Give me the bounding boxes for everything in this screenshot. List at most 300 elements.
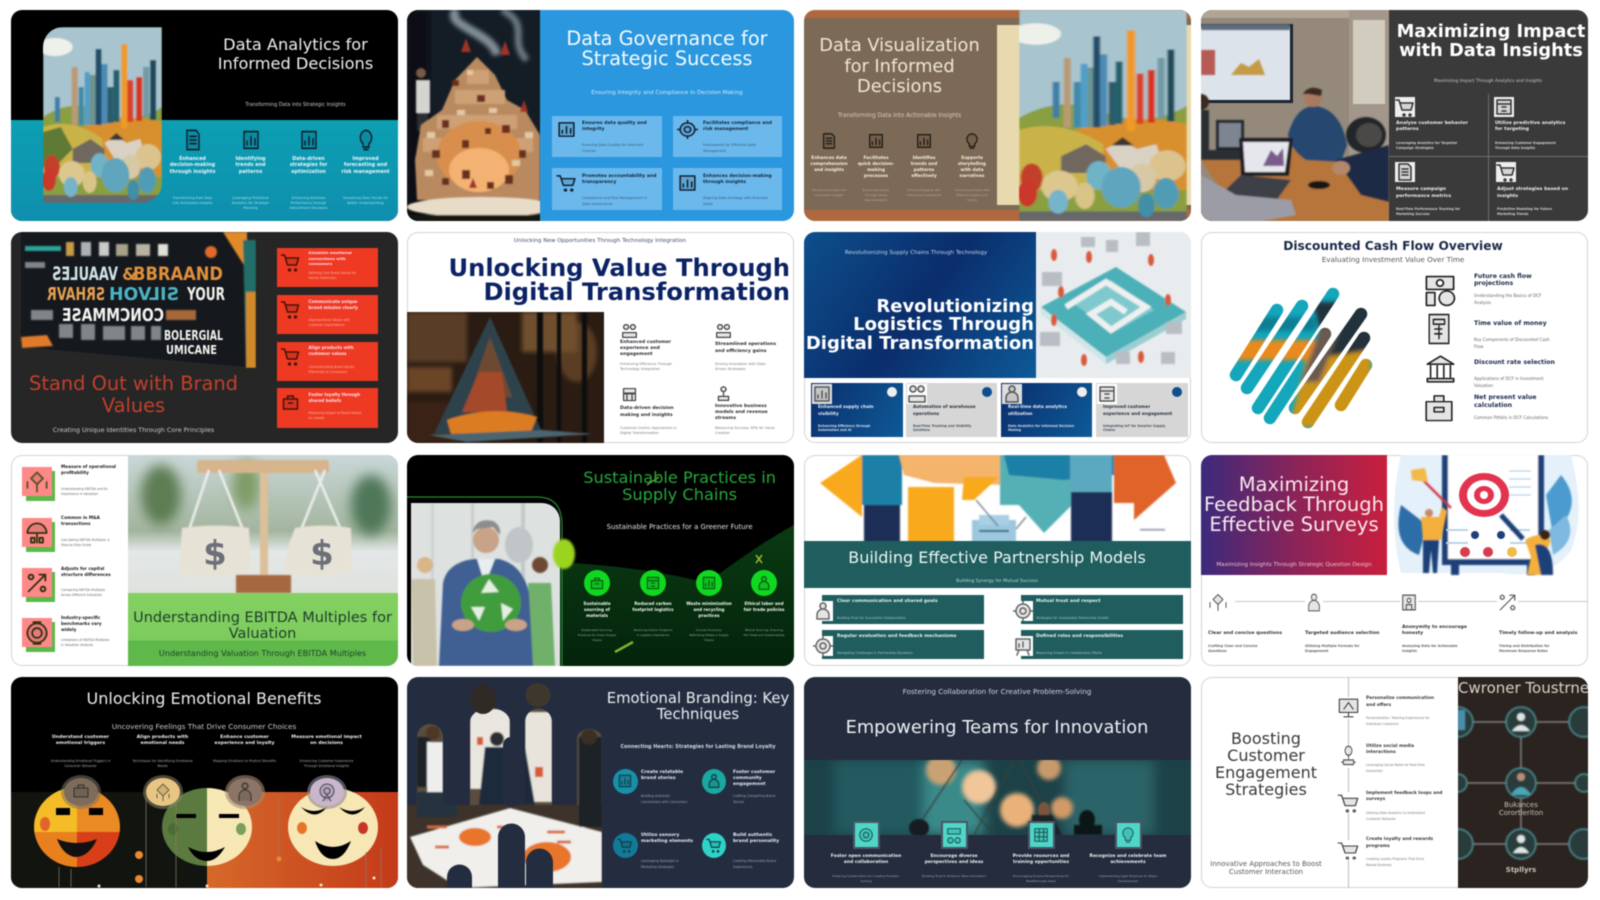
title [1215, 730, 1317, 798]
note 1 [172, 196, 213, 205]
note 3: Breakthrough Ideas [1026, 878, 1056, 882]
label 2: Align products with [137, 734, 188, 740]
item 2 note: Driven Strategies [715, 367, 746, 371]
label 2 [925, 854, 983, 866]
subtitle [1210, 860, 1322, 876]
item 4 text: insights [1497, 194, 1518, 199]
item note 2: Management [703, 148, 726, 152]
note 2: Techniques for Identifying Emotional [132, 758, 193, 762]
note 3: Mapping Emotions to Product Benefits [213, 758, 276, 762]
item 3 text: marketing elements [641, 839, 693, 844]
note 1: Chains [592, 638, 602, 642]
lime orb [553, 539, 575, 569]
item 3 text: Anonymity to encourage [1402, 624, 1467, 630]
item 4 note [733, 859, 776, 870]
item 1 text: profitability [61, 470, 89, 475]
note 4 [744, 628, 784, 638]
item 1 text: Create relatable [641, 770, 683, 775]
label 3: training opportunities [1013, 860, 1069, 865]
note: Automation and AI [818, 428, 852, 432]
subtitle: Sustainable Practices for a Greener Future [607, 523, 753, 531]
item note 4: Aligning Data Strategy with Business [703, 196, 768, 200]
item 1 note: Leveraging Analytics for Targeted [1396, 140, 1457, 144]
item 3 note [1402, 644, 1457, 655]
item 3 text [61, 566, 111, 579]
item 4 text: Net present value [1474, 394, 1536, 401]
icon: robot [907, 384, 927, 404]
note 3: Rethinking Waste in Supply [689, 632, 729, 636]
item 4 note [1366, 856, 1424, 868]
item 2 text: Streamlined operations [715, 342, 776, 347]
feature box 3 [276, 342, 378, 381]
image: mirrored typography wall: YOUR [186, 284, 225, 305]
label 4 [958, 154, 986, 179]
item 4 note [1499, 644, 1550, 655]
item 1 note [61, 486, 108, 496]
item 2 text: Foster customer [733, 770, 775, 775]
note: Data Analytics for Informed Decision [1008, 424, 1074, 428]
item 2 text [308, 298, 358, 310]
subtitle: Building Synergy for Mutual Success [956, 579, 1038, 584]
icon: notebook [242, 130, 260, 150]
item 4 text: Defined roles and responsibilities [1036, 634, 1123, 639]
note: Enhancing Efficiency through [818, 424, 870, 428]
icon: cart [617, 837, 633, 853]
image: meeting room photo [1201, 10, 1389, 221]
label 4: Supports [961, 156, 983, 161]
label 4: risk management [341, 169, 390, 175]
image: money bags on scale: $ [203, 534, 226, 574]
title [583, 468, 776, 502]
note 2 [132, 758, 193, 769]
title [448, 256, 790, 304]
item note 1: Choices [582, 148, 596, 152]
feature box 1 [552, 116, 662, 157]
note 2 [634, 628, 672, 638]
item 3 note: Real-Time Performance Tracking for [1396, 206, 1460, 210]
label 2: Encourage diverse [930, 854, 978, 859]
label 3 [686, 601, 732, 618]
item 2 text [61, 515, 100, 528]
note 4 [954, 188, 990, 203]
item 3 text [308, 344, 354, 356]
connector line [1235, 601, 1588, 602]
image: glowing globes band [804, 760, 1191, 835]
note 4: Ethical Sourcing: Ensuring [745, 628, 783, 632]
feature box 1 [276, 248, 378, 287]
item 4 text: Foster loyalty through [308, 392, 360, 396]
item 4 note: Experiences [733, 864, 752, 868]
note 4: Visualizing Data Trends for [343, 196, 388, 200]
item 4 text [715, 404, 768, 421]
label 4: Recognize and celebrate team [1090, 854, 1166, 859]
item 1 note: Questions [1208, 649, 1227, 653]
icon: award [715, 386, 732, 402]
note 1: Solving [860, 878, 872, 882]
label 1: Sustainable [583, 601, 611, 606]
panel: Sustainable Practices in Supply Chains [407, 455, 794, 666]
item 3 text [1402, 624, 1467, 638]
icon: document [678, 174, 696, 192]
image: mirrored typography wall: BBRAAND [132, 263, 222, 285]
item 3 text: Data-driven decision [620, 406, 674, 411]
label 3 [1013, 854, 1069, 866]
item 3 text: Adjusts for capital [61, 566, 104, 571]
item 4 note: on Loyalty [308, 416, 325, 420]
item 4 note [308, 410, 362, 421]
feature box 4 [1021, 630, 1183, 659]
item 1 note [1208, 644, 1257, 655]
label 2 [137, 734, 188, 748]
icon: cart [1496, 162, 1516, 182]
label 3: optimization [291, 169, 326, 175]
note 1: Understanding Emotional Triggers in [50, 758, 111, 762]
panel: Unlocking Emotional Benefits [10, 677, 398, 888]
subtitle: Connecting Hearts: Strategies for Lasting Brand Loyalty [620, 744, 776, 750]
badge 4 [10, 677, 398, 888]
title: Data Analytics for [223, 34, 368, 54]
label 1: comprehension [810, 162, 848, 167]
label [1103, 405, 1172, 418]
note 4: Charts [967, 198, 977, 202]
icon: customer [1097, 384, 1117, 404]
label 3: Waste minimization [686, 601, 732, 606]
subtitle: Ensuring Integrity and Compliance in Decision Making [591, 90, 743, 96]
note 2: Needs [157, 764, 168, 768]
item 1 note: Analysis [1474, 300, 1491, 305]
item 1 text: patterns [1396, 127, 1419, 132]
title: Unlocking Emotional Benefits [87, 689, 321, 708]
icon: presentation [1337, 697, 1360, 719]
note 2 [231, 196, 270, 210]
item 4 note: in Valuation Analysis [61, 643, 93, 647]
item 3 text: Utilize sensory [641, 833, 679, 838]
item 2 note: Driving Innovation with Data- [715, 362, 767, 366]
item 2 note: Strategies for Sustainable Partnership Growth [1036, 616, 1109, 620]
item 1 text: consumers [308, 261, 332, 266]
title: Values [102, 394, 165, 417]
item 3 note: Leveraging Nostalgia in [641, 859, 679, 863]
image: customer network board: Bukances [1504, 801, 1538, 809]
item 2 note [715, 362, 767, 372]
item 2 text [1366, 744, 1414, 757]
title: Discounted Cash Flow Overview [1283, 239, 1503, 253]
label 2: Reduced carbon [634, 601, 672, 606]
item 2 text: Communicate unique [308, 298, 357, 304]
icon circle 4 [702, 833, 726, 858]
item 4 text [1497, 187, 1568, 200]
note 2: Planning [243, 206, 258, 210]
hero gradient [804, 232, 1036, 378]
label 2: trends and [236, 162, 265, 168]
item 4 note: Predictive Modeling for Future [1497, 206, 1552, 210]
item 2 text: and efficiency gains [715, 349, 766, 354]
label 3: practices [698, 613, 720, 618]
item 3 note: Customer Behavior [1366, 816, 1396, 820]
label 2: footprint logistics [632, 607, 674, 612]
icon: cart [280, 299, 300, 319]
green title band [128, 593, 398, 666]
title [1397, 23, 1585, 60]
gradient hero [1201, 455, 1387, 575]
item note 2: Frameworks for Effective Data [703, 142, 756, 146]
item 1 text: Personalize communication [1366, 696, 1434, 701]
label 4: Ethical labor and [744, 601, 784, 606]
label: Enhanced supply chain [818, 405, 874, 410]
panel: Maximizing Impact with Data Insights [1201, 10, 1588, 221]
note 4: Enhancing Customer Experience [300, 758, 353, 762]
vertical divider [1348, 677, 1349, 888]
green wave backdrop [407, 455, 794, 666]
item note 3: Compliance and Risk Management in [582, 196, 647, 200]
icon: cash and coin [1423, 275, 1457, 307]
item text 3: Promotes accountability and [582, 174, 656, 179]
note 1: Sustainable Sourcing: [581, 628, 613, 632]
label 1: Enhances data [811, 156, 847, 161]
item 4 note: Creating Memorable Brand [733, 859, 776, 863]
icon: briefcase [1423, 393, 1455, 422]
title [566, 27, 768, 70]
item 1 note: Personalization: Tailoring Experiences for [1366, 716, 1430, 720]
icon tile 2 [941, 821, 968, 849]
label 3: effectively [911, 174, 937, 179]
card 4 [1096, 383, 1188, 437]
item 1 text: engagement [620, 352, 653, 357]
item 3 note [1366, 810, 1425, 822]
item 4 text: Timely follow-up and analysis [1499, 631, 1577, 636]
title: Stand Out with Brand [29, 372, 238, 395]
item 2 note: Leveraging Social Media for Real-Time [1366, 763, 1425, 767]
title [29, 373, 238, 417]
label 4 [340, 155, 390, 175]
title: Customer [1227, 746, 1305, 764]
teal lower band [10, 120, 398, 221]
item note 3: Data Governance [582, 202, 613, 206]
item 2 note: Interaction [1366, 769, 1383, 773]
note 2: Leveraging Predictive [232, 196, 269, 200]
icon: book dollar [1425, 313, 1453, 345]
grid divider vertical [1488, 94, 1489, 221]
label 4 [1090, 854, 1166, 866]
icon: gear [676, 119, 699, 140]
note 4 [1099, 874, 1157, 884]
note 4: Better Understanding [347, 200, 384, 204]
item 4 text [308, 392, 360, 404]
note 2 [862, 188, 890, 202]
item 3 note: Insights [1402, 649, 1417, 653]
note 1 [832, 874, 900, 884]
title: Strategic Success [582, 47, 752, 70]
feature box 3 [552, 168, 662, 210]
image: customer network board: Stpllyrs [1506, 866, 1536, 874]
item 3 note: Valuation [1474, 383, 1493, 388]
item note 3 [582, 196, 648, 206]
item text 2 [702, 120, 772, 132]
item 3 note: Customer-Centric Approaches in [620, 426, 677, 430]
item 1 note [1474, 292, 1541, 306]
title [218, 34, 374, 72]
icon: truck [812, 384, 832, 404]
note: Chains [1103, 428, 1115, 432]
note [1103, 424, 1165, 433]
label 2 [235, 155, 266, 175]
icon: community [706, 773, 722, 789]
title: Maximizing Impact [1397, 21, 1585, 42]
icon: dashboard [916, 134, 932, 148]
image: customer network board: Corortleriton [1499, 809, 1543, 817]
item 2 text: brand mission clearly [308, 304, 358, 310]
item 4 text [733, 833, 779, 845]
image: isometric supply chain [1036, 232, 1191, 378]
subtitle: Transforming Data into Actionable Insights [838, 113, 961, 119]
note 1 [578, 628, 616, 642]
item 2 text: Common in M&A [61, 515, 100, 520]
item 3 text [1396, 187, 1451, 200]
note 4 [342, 196, 388, 205]
label 1: and insights [814, 168, 844, 173]
item note 1: Ensuring Data Quality for Informed [582, 142, 643, 146]
label [818, 405, 874, 418]
image: man holding recycling globe [411, 503, 560, 666]
item text 1 [582, 120, 647, 132]
icon: building [621, 387, 638, 402]
item 1 note: Enhancing Efficiency Through [620, 362, 672, 366]
label 3 [289, 155, 328, 175]
image: money bags on scale: $ [310, 534, 333, 574]
item 4 text: Adjust strategies based on [1497, 187, 1568, 192]
title: for Informed [844, 56, 955, 76]
label 2: patterns [239, 169, 262, 175]
title: Feedback Through [1204, 493, 1384, 516]
item 3 note [620, 426, 677, 436]
label: utilization [1008, 412, 1032, 417]
label 1 [583, 601, 611, 618]
item 1 text: and offers [1366, 703, 1391, 708]
label 1: Enhanced [179, 156, 206, 162]
title: Emotional Branding: Key [607, 690, 789, 707]
item 2 text [733, 770, 775, 789]
icon: person [1305, 592, 1323, 613]
illustration: target board [1201, 455, 1588, 576]
label 3: and recycling [693, 607, 724, 612]
label 1: sourcing of [584, 607, 610, 612]
item 2 note: Customer Expectations [308, 323, 345, 327]
icon circle 2 [640, 570, 666, 596]
label 2 [858, 154, 894, 179]
item 3 note [1396, 206, 1460, 218]
label 1 [831, 854, 901, 866]
note 4: Effective Graphs and [956, 193, 988, 197]
item 2 note: Flow [1474, 344, 1483, 349]
card 1 [811, 383, 903, 437]
image: customer network board: Cwroner Toustrne [1458, 679, 1588, 697]
image: mirrored typography wall: SRHAVR [46, 284, 104, 305]
panel: Data Analytics for Informed Decisions [10, 10, 398, 221]
item 2 note: Step-by-Step Guide [61, 542, 91, 546]
item 2 text [1495, 120, 1565, 134]
item 1 note [1366, 714, 1430, 726]
image: mirrored typography wall: CONCMMASE [62, 305, 164, 326]
label 1: emotional triggers [56, 741, 105, 746]
feature box 2 [673, 116, 782, 157]
image: mirrored typography wall: SILVOH [108, 284, 178, 305]
subtitle: Understanding Valuation Through EBITDA Multiples [159, 648, 366, 658]
item 3 note: Marketing Success [1396, 212, 1430, 216]
subtitle: Uncovering Feelings That Drive Consumer Choices [112, 722, 296, 730]
title: Informed Decisions [218, 54, 373, 72]
label: experience and engagement [1103, 412, 1172, 417]
icon: people [715, 323, 732, 339]
item 4 text [1366, 837, 1433, 851]
label 4: narratives [960, 174, 984, 179]
icon: people [621, 323, 638, 339]
title: Boosting [1231, 728, 1301, 748]
item 4 text: widely [61, 627, 76, 632]
note 3: Circular Economy: [696, 628, 722, 632]
subtitle: Maximizing Insights Through Strategic Question Design [1216, 562, 1372, 568]
icon circle 3 [612, 833, 638, 858]
icon: worker [1002, 384, 1022, 404]
subtitle: Customer Interaction [1229, 868, 1303, 876]
title: Revolutionizing [876, 296, 1034, 316]
label 2: making [867, 168, 885, 173]
badge 2 [10, 677, 398, 888]
item 2 text: for targeting [1495, 127, 1529, 132]
item 1 note [308, 270, 356, 281]
icon circle 2 [702, 768, 726, 794]
item 3 text: surveys [1366, 797, 1385, 802]
item 1 text [1396, 120, 1468, 134]
item 4 note: Measuring Impact in Collaborative Efforts [1036, 650, 1102, 654]
item text 4 [702, 172, 772, 185]
note 4: Fair Trade and Sustainability [744, 632, 784, 636]
item 4 text: Create loyalty and rewards [1366, 837, 1433, 842]
item 4 note: Timing and Distribution for [1499, 644, 1550, 648]
label 1: through insights [170, 169, 215, 175]
item text 3: transparency [582, 180, 616, 185]
item 1 text: connections with [308, 256, 346, 260]
note 1: Transforming Data into [812, 188, 846, 192]
item 4 text: Build authentic [733, 833, 773, 838]
item 3 note [1474, 375, 1543, 389]
item 4 text: models and revenue [715, 410, 768, 415]
image: mirrored typography wall: BOLERGIAL [164, 329, 222, 344]
item 1 note: Individual Customers [1366, 722, 1399, 726]
label 1: materials [586, 613, 608, 618]
item 1 text [641, 770, 683, 782]
item 4 note: Creation [715, 431, 730, 435]
icon: cart [1337, 792, 1360, 813]
item 4 note [61, 638, 109, 648]
label 1 [169, 155, 216, 175]
title: Effective Surveys [1209, 513, 1379, 536]
icon: storyboard [617, 773, 633, 789]
panel: Unlocking Value Through Digital Transformation [407, 232, 794, 443]
item 2 text: Mutual trust and respect [1036, 599, 1101, 604]
item 1 text: brand stories [641, 776, 676, 781]
icon tile 4 [22, 618, 54, 655]
item 2 note: Crafting Compelling Brand [733, 794, 775, 798]
label 4 [291, 734, 362, 748]
item 2 note: Enhancing Customer Engagement [1495, 140, 1556, 144]
icon: document [1395, 162, 1415, 182]
item 2 note [1305, 644, 1360, 655]
title [819, 35, 980, 97]
label [913, 405, 976, 418]
title: with Data Insights [1399, 40, 1583, 60]
title: Engagement [1215, 762, 1317, 782]
item 2 note [308, 318, 350, 328]
